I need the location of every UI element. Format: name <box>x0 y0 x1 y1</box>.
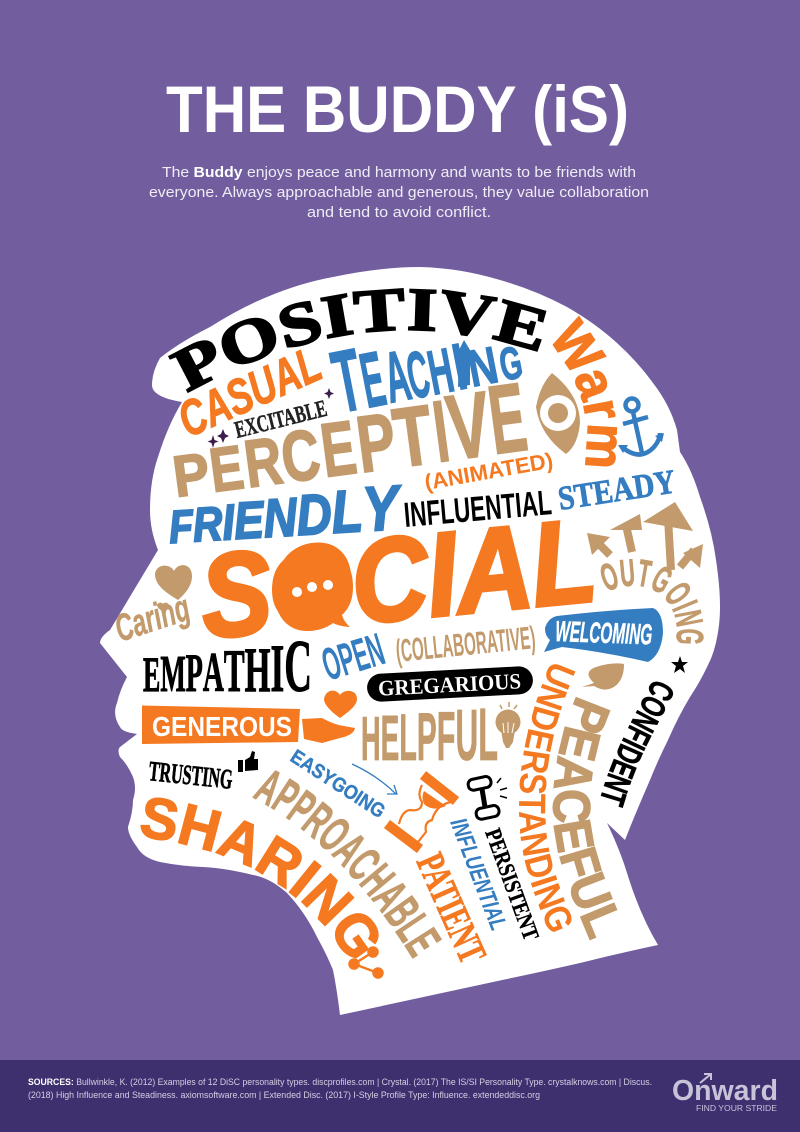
word: Warm: Warm <box>552 316 618 466</box>
word: ANIMATED: (ANIMATED) <box>423 448 555 495</box>
word: TEACHING with pencil <box>325 329 527 432</box>
intro text block: and tend to avoid conflict. <box>307 205 491 221</box>
word: INFLUENTIAL black: INFLUENTIAL <box>402 483 553 535</box>
footer sources: SOURCES: Bullwinkle, K. (2012) Examples of 12 DiSC personality types. discprofiles.com | Crystal. (2017) The IS/SI Personality Type. crystalknows.com | Discus. <box>28 1077 652 1087</box>
label: GREGARIOUS pill: GREGARIOUS <box>377 668 522 701</box>
word: CASUAL: CASUAL <box>170 336 330 448</box>
title: THE BUDDY (iS) <box>166 72 629 146</box>
word: TEACHING with pencil: T <box>325 329 370 432</box>
word: TEACHING with pencil: N <box>463 336 503 399</box>
word: Caring: Caring <box>110 587 195 651</box>
word: FRIENDLY: FRIENDLY <box>167 473 405 557</box>
word: EXCITABLE with sparkles <box>208 388 334 448</box>
text: (COLLABORATIVE) <box>394 619 537 669</box>
word: UNDERSTANDING: UNDERSTANDING <box>518 664 576 932</box>
word: TEACHING with pencil: C <box>401 336 435 413</box>
word: PATIENT: PATIENT <box>408 846 496 970</box>
word: STEADY: STEADY <box>556 463 678 518</box>
word: EXCITABLE with sparkles: EXCITABLE <box>232 396 330 444</box>
icon: star <box>671 656 688 673</box>
word: PERCEPTIVE: C <box>277 415 325 498</box>
logo: Onward: FIND YOUR STRIDE <box>696 1104 777 1113</box>
head silhouette <box>100 267 720 1015</box>
word: PERCEPTIVE: P <box>169 441 213 510</box>
word: TEACHING with pencil: E <box>353 334 392 425</box>
word: TRUSTING: TRUSTING <box>147 756 234 796</box>
icon: orange heart and hand <box>302 691 357 743</box>
word: PERCEPTIVE <box>169 362 532 510</box>
word: TEACHING with pencil: I <box>447 329 472 404</box>
icon: anchor <box>618 398 664 454</box>
footer band <box>0 1060 800 1132</box>
word: TEACHING with pencil: A <box>378 336 417 419</box>
speech bubble: WELCOMING <box>544 608 663 662</box>
label: GENEROUS box: GENEROUS <box>152 711 292 742</box>
word: APPROACHABLE: APPROACHABLE <box>252 770 442 959</box>
word: SHARING: SHARING <box>140 798 379 958</box>
word: POSITIVE: POSITIVE <box>168 288 546 394</box>
word: PERCEPTIVE: E <box>316 405 361 494</box>
logo: Onward: Onward <box>672 1075 778 1107</box>
intro text block: everyone. Always approachable and generous, they value collaboration <box>149 185 649 201</box>
footer sources <box>28 1077 652 1100</box>
word: CONFIDENT: CONFIDENT <box>600 682 674 808</box>
word: TEACHING with pencil: H <box>422 335 459 409</box>
word: PERCEPTIVE: R <box>240 423 287 502</box>
icon: light bulb <box>496 702 520 748</box>
footer sources: (2018) High Influence and Steadiness. axiomsoftware.com | Extended Disc. (2017) I-Style Profile Type: Influence. extendeddisc.org <box>28 1090 540 1100</box>
word: Caring <box>110 587 195 651</box>
intro text block <box>149 165 649 221</box>
speech bubble: WELCOMING: WELCOMING <box>555 616 653 651</box>
icon: leaf <box>582 663 624 690</box>
word: PERCEPTIVE: I <box>428 383 454 481</box>
word: PERSISTENT: PERSISTENT <box>480 825 544 944</box>
icon: eye <box>536 373 580 454</box>
word: INFLUENTIAL blue: INFLUENTIAL <box>444 814 512 934</box>
word: PERCEPTIVE: P <box>351 396 401 489</box>
icon: tan heart <box>155 565 192 600</box>
word: SOCIAL with speech bubble: SOCIAL <box>195 495 602 664</box>
word: PERCEPTIVE: E <box>482 362 532 475</box>
word: EMPATHIC: EMPATHIC <box>143 626 312 708</box>
word: PERCEPTIVE: V <box>441 373 496 480</box>
arrow: easygoing <box>352 764 397 794</box>
word: OUTGOING: OUTGOING <box>600 558 704 644</box>
word: PERCEPTIVE: T <box>388 387 438 485</box>
word: HELPFUL: HELPFUL <box>361 693 498 776</box>
word: OPEN: OPEN <box>316 623 390 691</box>
icon: arrows <box>587 502 703 570</box>
intro text block: The Buddy enjoys peace and harmony and wants to be friends with <box>162 165 636 181</box>
word: PEACEFUL: PEACEFUL <box>552 696 618 940</box>
icon: share <box>350 948 382 978</box>
word: TEACHING with pencil: G <box>495 336 527 391</box>
word: EASYGOING: EASYGOING <box>286 746 389 823</box>
icon: dumbbell <box>467 776 507 820</box>
icon: hourglass <box>387 775 456 849</box>
word: PERCEPTIVE: E <box>206 433 248 506</box>
icon: thumbs up <box>238 751 258 772</box>
